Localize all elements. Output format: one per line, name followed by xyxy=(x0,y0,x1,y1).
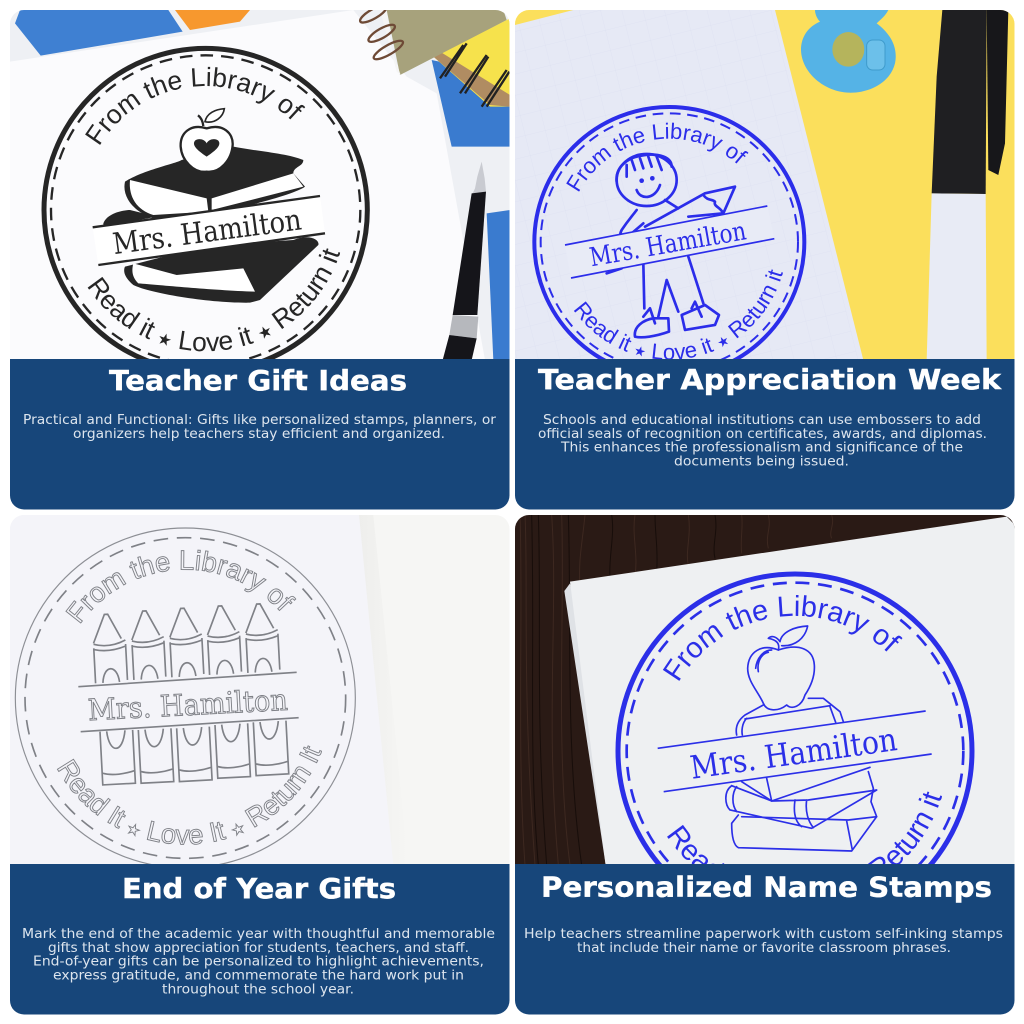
caption band: Teacher Appreciation Week xyxy=(515,359,1015,510)
caption band: Personalized Name Stamps xyxy=(515,864,1015,1015)
photo: blue stamp on graph paper with marker and toy xyxy=(515,10,1014,359)
heading: Personalized Name Stamps xyxy=(541,870,992,904)
stamp seal: Read it ★ Love it ★ Return it xyxy=(667,792,942,864)
body text: throughout the school year. xyxy=(162,982,354,997)
panel: End of Year Gifts xyxy=(10,515,510,1014)
caption band: End of Year Gifts xyxy=(10,864,510,1015)
panel: Personalized Name Stamps xyxy=(515,515,1014,1014)
stamp seal xyxy=(42,46,370,359)
embossed seal xyxy=(14,527,356,864)
body text: Mark the end of the academic year with thoughtful and memorable xyxy=(22,927,495,942)
panel: Teacher Gift Ideas xyxy=(10,10,510,510)
embossed seal: Mrs. Hamilton xyxy=(87,683,289,727)
body text: documents being issued. xyxy=(674,455,849,470)
heading: Teacher Appreciation Week xyxy=(538,363,1002,396)
photo: blue stamp on paper stack on dark wood xyxy=(515,515,1014,864)
body text: This enhances the professionalism and significance of the xyxy=(560,441,963,456)
caption band: Teacher Gift Ideas xyxy=(10,359,510,510)
stamp seal: Mrs. Hamilton xyxy=(111,202,304,261)
toy xyxy=(801,10,896,93)
stamp seal: From the Library of xyxy=(566,122,748,192)
panel: Teacher Appreciation Week xyxy=(515,10,1014,510)
heading: End of Year Gifts xyxy=(122,872,396,905)
stamp seal: Mrs. Hamilton xyxy=(587,216,749,273)
body text: Practical and Functional: Gifts like personalized stamps, planners, or xyxy=(23,413,497,428)
embossed seal: From the Library of xyxy=(65,550,296,624)
crayons xyxy=(92,603,289,785)
stamp seal: Read it ★ Love it ★ Return it xyxy=(88,248,340,352)
photo: embossed seal on white paper xyxy=(10,515,510,864)
body text xyxy=(538,413,987,470)
body text: End-of-year gifts can be personalized to highlight achievements, xyxy=(33,955,484,970)
stamp seal: From the Library of xyxy=(85,66,306,145)
photo: black stamp on white paper with notebooks and pen xyxy=(10,10,510,359)
body text: Help teachers streamline paperwork with custom self-inking stamps xyxy=(524,927,1003,942)
body text: organizers help teachers stay efficient and organized. xyxy=(73,427,445,442)
body text: Schools and educational institutions can use embossers to add xyxy=(543,413,981,428)
stamp seal: Mrs. Hamilton xyxy=(688,720,899,787)
stamp seal xyxy=(616,572,974,864)
marker xyxy=(927,10,1008,360)
stamp seal xyxy=(532,105,806,359)
body text: official seals of recognition on certificates, awards, and diplomas. xyxy=(538,427,987,442)
body text xyxy=(524,927,1003,956)
pen xyxy=(443,162,486,360)
body text xyxy=(22,927,495,997)
stamp seal: Read it ★ Love it ★ Return it xyxy=(574,269,783,359)
body text: gifts that show appreciation for students, teachers, and staff. xyxy=(48,941,469,956)
body text xyxy=(23,413,497,442)
stamp seal: From the Library of xyxy=(662,595,902,681)
body text: express gratitude, and commemorate the hard work put in xyxy=(53,969,464,984)
heading: Teacher Gift Ideas xyxy=(109,364,407,397)
body text: that include their name or favorite classroom phrases. xyxy=(577,941,951,956)
embossed seal: Read It ★ Love It ★ Return It xyxy=(56,745,322,845)
